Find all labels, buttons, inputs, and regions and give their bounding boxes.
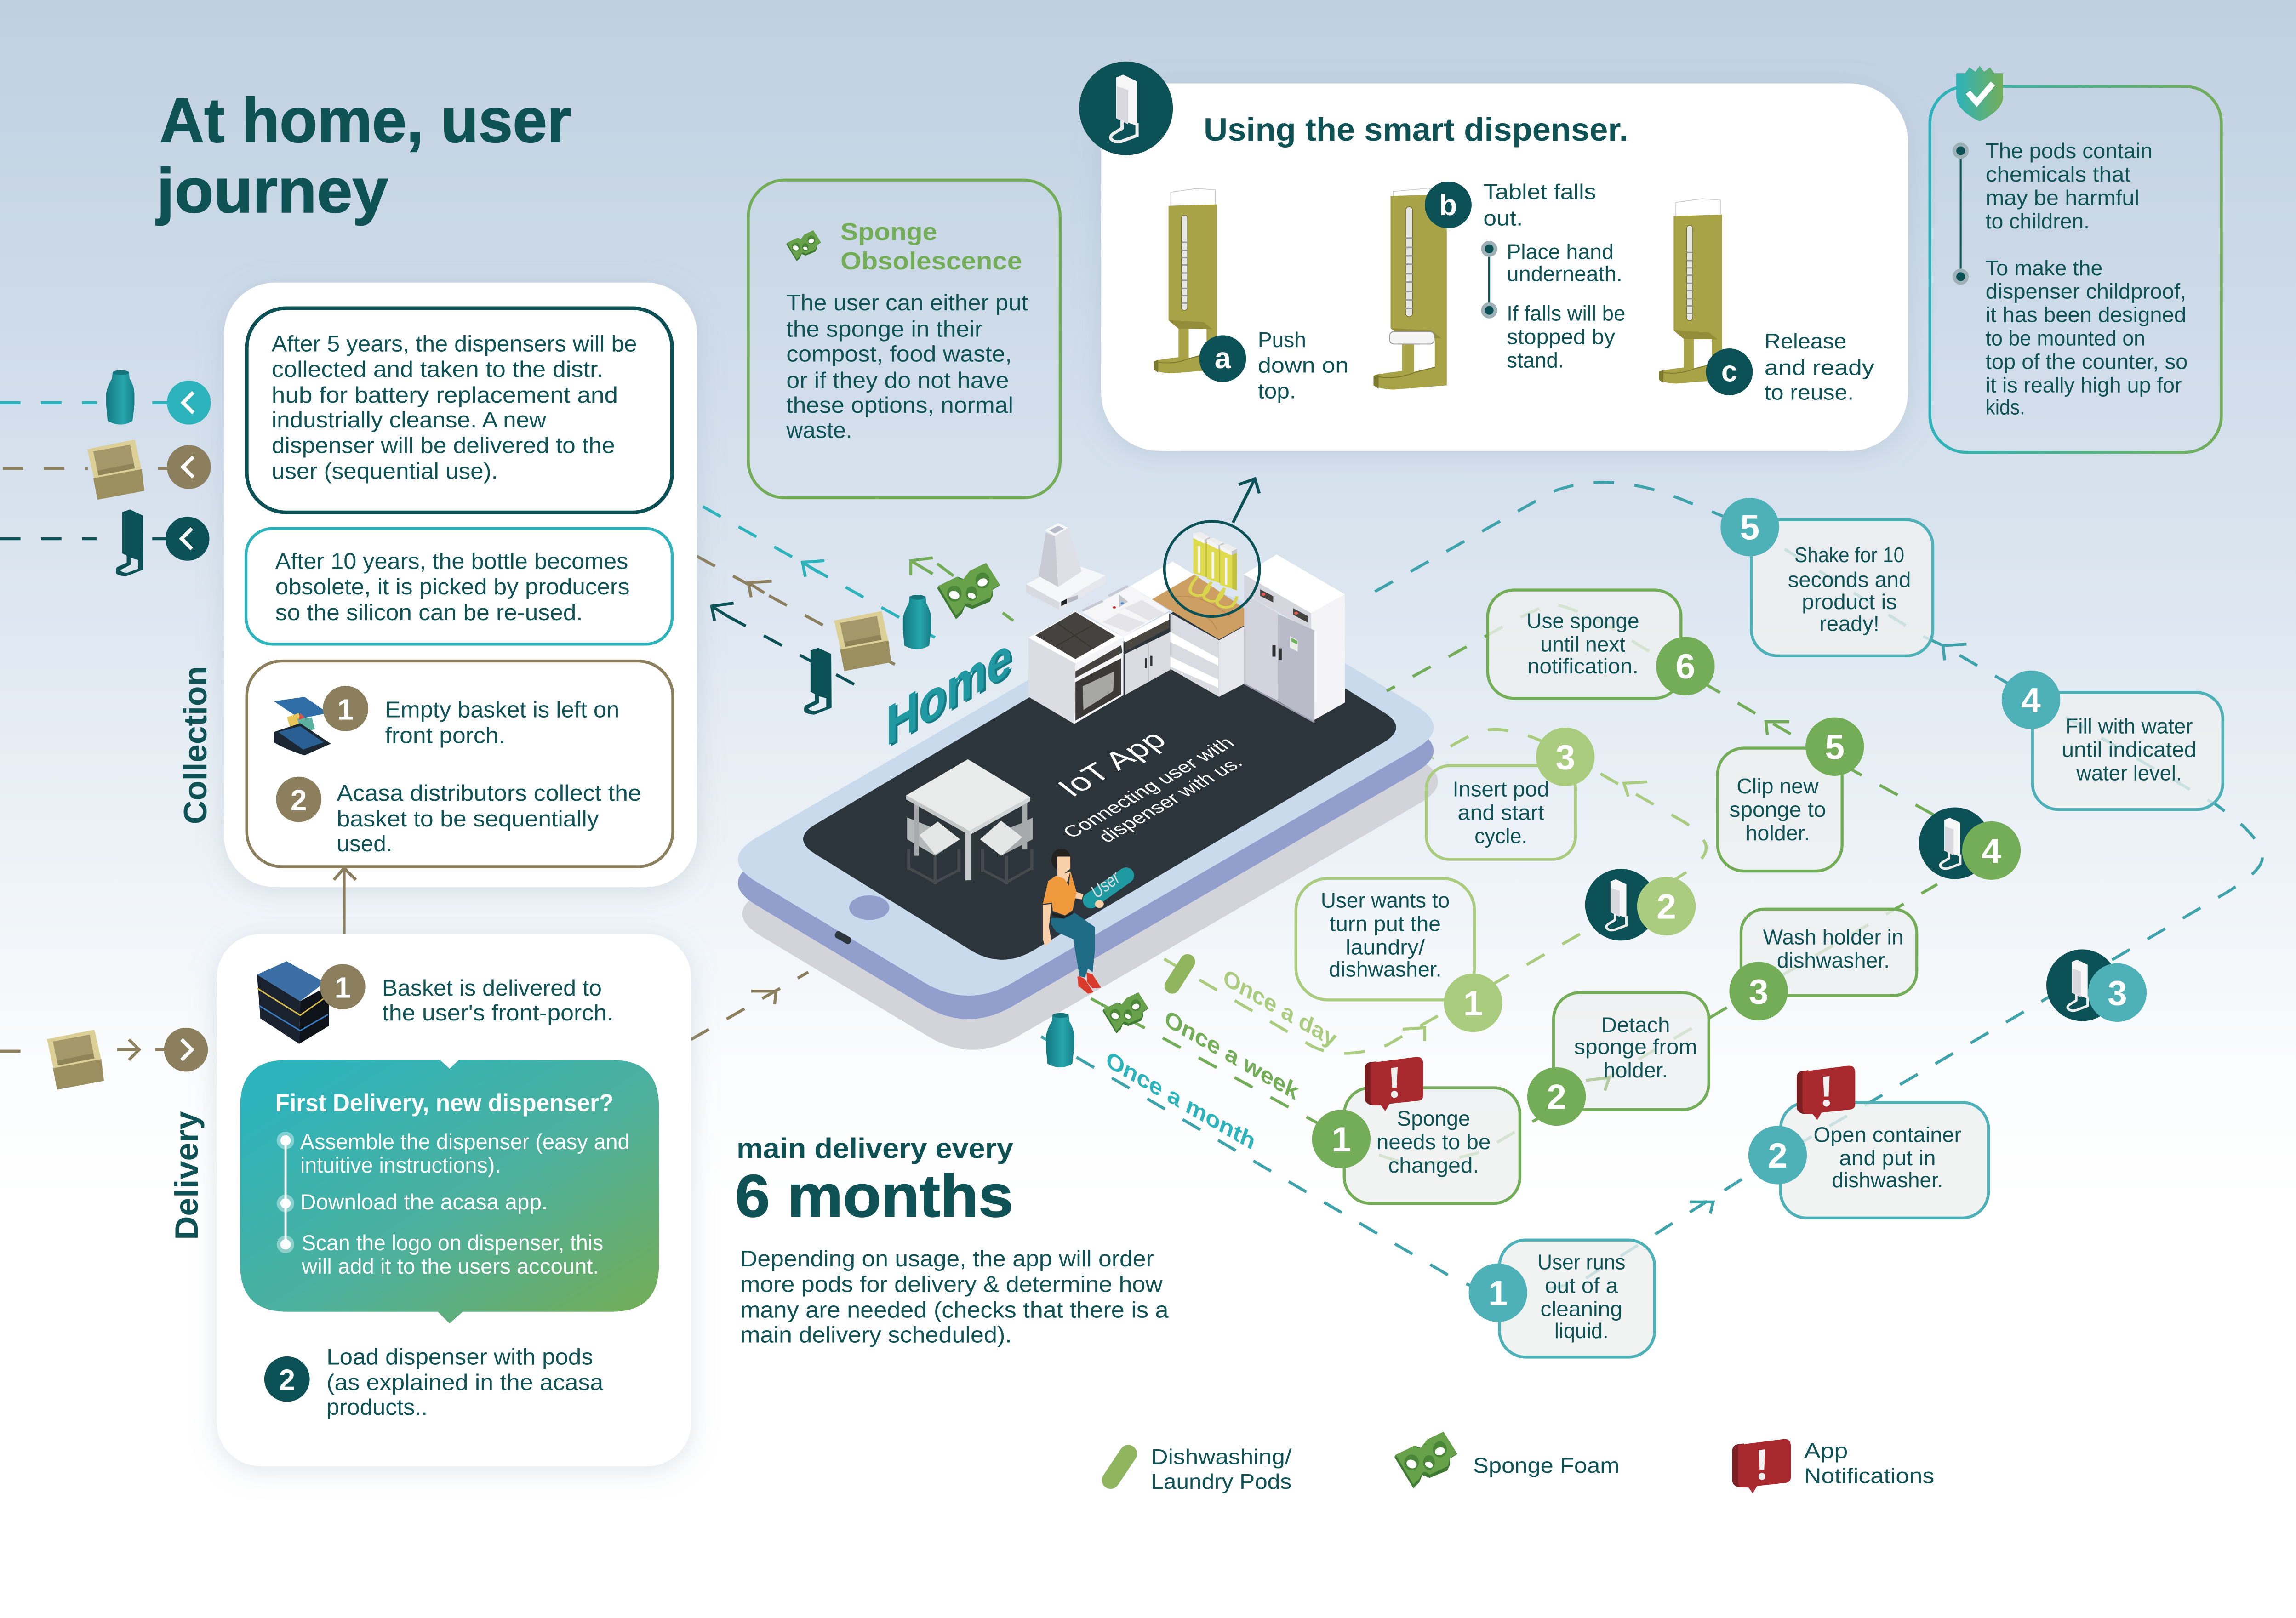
panel: child safety [1930,66,2222,452]
step: sponge 3 [1729,909,1917,1020]
wooden counter [1152,575,1244,639]
text block: after 5 years: industrially cleanse. A new [272,407,546,433]
step: sponge 6: until next [1541,632,1625,656]
step c: Release [1765,329,1846,353]
step a: down on [1258,353,1348,377]
panel: sponge obsolescence [748,180,1060,498]
step: liquid 5 [1720,498,1933,656]
panel: child safety: it has been designed [1986,303,2186,327]
text block: after 10 years: so the silicon can be re-used. [275,600,583,625]
dashed route: collection and delivery rows at the left edge [0,403,170,1060]
callout: first delivery: Assemble the dispenser (easy and [300,1129,630,1154]
panel: sponge obsolescence: compost, food waste, [786,342,1012,367]
icon: sponge [786,230,821,261]
step: sponge 3: 3 [1749,972,1768,1011]
panel: child safety: The pods contain [1986,139,2153,163]
text block: after 10 years: obsolete, it is picked by producers [275,574,630,599]
legend: sponge: Sponge Foam [1473,1453,1620,1477]
step: sponge 2 [1527,992,1709,1126]
text block: after 5 years [247,308,672,513]
panel: collection [224,283,697,887]
step: liquid 4: 4 [2021,681,2041,720]
panel: child safety: it is really high up for [1986,373,2182,397]
step: sponge 1 [1312,1057,1520,1203]
step: sponge 6 [1488,590,1715,698]
title: At home, user [160,85,571,156]
step a: top. [1258,379,1296,403]
label: IoT App: dispenser with us. [1093,753,1248,846]
fridge [1244,554,1345,613]
brown row: basket return [87,439,211,500]
step: liquid 3 [2046,949,2147,1022]
teal row: bottle return [106,370,211,425]
text block: main delivery every 6 months: main delivery every [737,1133,1013,1164]
label: Home: Home [886,623,1011,759]
frequency labels: Once a month [1105,1045,1256,1156]
step: sponge 2: sponge from [1574,1035,1697,1059]
step c: and ready [1765,355,1875,379]
panel: sponge obsolescence: these options, normal [786,393,1013,418]
dashed routes: frequency loops [1041,482,2262,1293]
step: pods 2 [1585,869,1696,940]
step c: c [1721,355,1737,388]
text block: basket collection: 1 [337,693,354,726]
frequency labels: Once a day [1222,963,1338,1054]
panel: delivery: 1 [335,972,351,1004]
step: sponge 5: Clip new [1736,774,1819,798]
step: sponge 3: dishwasher. [1777,948,1890,972]
step: liquid 4: water level. [2076,761,2182,785]
panel: delivery: the user's front-porch. [382,1000,613,1025]
step: liquid 2 [1748,1066,1988,1218]
step: sponge 1: Sponge [1397,1106,1470,1130]
collected items near home [804,563,1000,715]
panel: child safety: chemicals that [1986,162,2130,186]
panel: delivery: (as explained in the acasa [326,1370,604,1395]
phone with isometric kitchen [738,523,1438,1050]
text block: basket collection [247,661,673,866]
step: liquid 1: liquid. [1554,1319,1609,1343]
arrow: delivery to collection [334,868,356,969]
panel: using the smart dispenser: Using the smart dispenser. [1204,112,1628,148]
panel: sponge obsolescence: or if they do not have [786,368,1009,393]
legend: pods [1111,1445,1291,1493]
text block: basket collection: Empty basket is left on [385,697,619,723]
step: liquid 2: and put in [1839,1146,1936,1170]
text block: main delivery every 6 months: 6 months [735,1162,1013,1230]
callout: first delivery: Scan the logo on dispenser, this [302,1231,603,1255]
hood chimney [1039,533,1058,587]
step: liquid 4 [2002,671,2223,809]
step: pods 3 [1426,728,1594,860]
step b: Place hand [1507,240,1614,264]
legend: pods: Dishwashing/ [1151,1445,1291,1469]
step: pods 1: dishwasher. [1329,957,1442,981]
step: liquid 5: product is [1802,590,1897,614]
arrow from dispensers to smart dispenser panel [1233,479,1259,523]
table and chairs [906,759,1033,884]
step b: underneath. [1507,262,1622,286]
step: sponge 4: 4 [1982,832,2001,871]
frequency icons [1046,962,1188,1067]
text block: main delivery every 6 months: more pods for delivery & determine how [740,1272,1163,1297]
label: User: User [1087,867,1124,902]
label: IoT App: IoT App [1051,725,1174,802]
dark row: dispenser return [116,509,209,576]
step: sponge 5: 5 [1825,728,1845,767]
frequency labels: Once a week [1164,1004,1300,1106]
text block: after 5 years: collected and taken to the distr. [272,357,603,382]
step: pods 2: 2 [1656,888,1676,927]
step: sponge 2: Detach [1601,1013,1670,1037]
sink [1082,586,1169,637]
text block: after 10 years: After 10 years, the bottle becomes [275,548,628,574]
step: liquid 1: cleaning [1541,1297,1622,1321]
stove [1028,638,1075,724]
panel: sponge obsolescence: Obsolescence [840,247,1022,275]
icon: shield [1956,66,2003,121]
step: sponge 1: changed. [1388,1153,1479,1177]
text block: after 5 years: user (sequential use). [272,458,498,484]
panel: delivery [217,934,691,1466]
step: pods 3: and start [1458,801,1544,825]
text block: basket collection: basket to be sequentially [337,806,599,832]
step: sponge 6: notification. [1527,654,1639,678]
step b [1373,180,1625,390]
legend: app notifications: Notifications [1804,1464,1934,1487]
step b: If falls will be [1507,302,1625,325]
yellow dispensers on the counter [1190,532,1210,596]
panel: child safety: may be harmful [1986,186,2139,210]
panel: sponge obsolescence: The user can either put [786,290,1028,315]
step c: to reuse. [1765,380,1854,404]
step: sponge 6: Use sponge [1526,609,1639,632]
callout: first delivery: intuitive instructions). [300,1153,501,1177]
step: liquid 3: 3 [2108,974,2127,1013]
text block: main delivery every 6 months: Depending on usage, the app will order [740,1246,1154,1271]
step b: out. [1483,206,1523,230]
step: liquid 5: 5 [1740,508,1759,547]
heading: delivery: Delivery [169,1111,205,1240]
panel: delivery: 2 [279,1364,295,1396]
panel: child safety: to children. [1986,209,2090,233]
hood base [1026,562,1106,603]
legend: app notifications [1732,1439,1934,1493]
step: sponge 5: holder. [1745,821,1810,845]
step: pods 3: Insert pod [1452,777,1549,801]
title: journey [155,156,388,226]
text block: main delivery every 6 months: many are needed (checks that there is a [740,1297,1169,1322]
step c [1659,199,1875,404]
step: liquid 4: until indicated [2062,738,2196,762]
icon: closed basket [257,961,329,1044]
text block: after 5 years: dispenser will be delivered to the [272,433,615,458]
text block: after 5 years: After 5 years, the dispensers will be [272,331,637,356]
text block: basket collection: 2 [291,784,307,817]
step: liquid 2: Open container [1814,1122,1961,1146]
step: pods 1 [1296,878,1502,1032]
icon: open basket [274,697,331,755]
step: sponge 6: 6 [1676,647,1695,686]
step: liquid 2: dishwasher. [1832,1168,1943,1192]
step: sponge 2: 2 [1547,1078,1566,1117]
step b: Tablet falls [1483,180,1596,204]
text block: after 5 years: hub for battery replacement and [272,382,618,408]
step: sponge 2: holder. [1604,1058,1668,1082]
panel: delivery: products.. [326,1395,428,1420]
icon: dispenser badge [1079,62,1173,155]
step: pods 3: cycle. [1474,824,1527,848]
step: pods 1: laundry/ [1346,935,1425,959]
panel: delivery: Load dispenser with pods [326,1344,593,1369]
panel: child safety: top of the counter, so [1986,350,2187,374]
step: liquid 5: seconds and [1788,568,1911,592]
step a: Push [1258,328,1306,352]
text block: basket collection: Acasa distributors collect the [337,781,641,806]
text block: basket collection: front porch. [385,723,505,748]
panel: sponge obsolescence: Sponge [840,218,937,245]
panel: delivery: Basket is delivered to [382,975,602,1001]
legend: sponge [1394,1432,1620,1488]
step: sponge 1: 1 [1331,1120,1351,1159]
step: pods 3: 3 [1555,738,1575,777]
frequency labels [1105,963,1338,1156]
kitchen [1026,523,1345,724]
callout: first delivery: Download the acasa app. [300,1190,548,1214]
step: sponge 3: Wash holder in [1763,925,1903,949]
dashed routes between home and collection [691,507,1013,1039]
step b: b [1439,189,1457,222]
panel: child safety: dispenser childproof, [1986,279,2186,303]
step b: stopped by [1507,325,1616,348]
back counter [1131,561,1199,599]
step: sponge 5 [1718,718,1864,871]
legend: pods: Laundry Pods [1151,1470,1291,1493]
step a: a [1215,342,1231,375]
label: Home: Home [888,624,1014,760]
step b: stand. [1507,348,1564,372]
person sitting on phone [1043,849,1101,994]
label: IoT App: Connecting user with [1058,734,1239,842]
step: liquid 5: Shake for 10 [1794,543,1904,567]
callout: first delivery: will add it to the users account. [301,1254,599,1278]
step: liquid 4: Fill with water [2065,714,2193,738]
step: liquid 1 [1469,1240,1655,1357]
panel: child safety: to be mounted on [1986,326,2145,350]
dispenser highlight circle [1165,521,1260,616]
step: sponge 1: needs to be [1376,1130,1491,1154]
panel: child safety: To make the [1986,256,2103,280]
step: pods 1: User wants to [1321,889,1450,912]
step: liquid 1: 1 [1488,1274,1508,1313]
callout: first delivery [240,1059,659,1323]
step: pods 1: 1 [1463,984,1483,1023]
panel: child safety: kids. [1986,395,2025,419]
text block: after 10 years [246,529,672,644]
text block: basket collection: used. [337,831,393,856]
panel: sponge obsolescence: waste. [786,417,852,443]
title [155,85,571,226]
callout: first delivery: First Delivery, new dispenser? [275,1089,613,1117]
legend: app notifications: App [1804,1439,1848,1463]
step: sponge 5: sponge to [1729,798,1826,821]
step: liquid 2: 2 [1768,1136,1788,1175]
text block: main delivery every 6 months [735,1133,1169,1348]
panel: sponge obsolescence: the sponge in their [786,317,982,342]
heading: collection: Collection [177,666,213,824]
step: sponge 4 [1919,807,2021,880]
panel: using the smart dispenser [1079,62,1908,451]
step a [1154,188,1348,403]
text block: main delivery every 6 months: main delivery scheduled). [740,1322,1012,1348]
step: liquid 5: ready! [1819,612,1879,636]
shelves [1171,613,1219,697]
step: liquid 1: out of a [1545,1273,1618,1297]
step: liquid 1: User runs [1537,1250,1625,1274]
delivery row: basket incoming [47,1028,208,1090]
step: pods 1: turn put the [1330,912,1441,936]
